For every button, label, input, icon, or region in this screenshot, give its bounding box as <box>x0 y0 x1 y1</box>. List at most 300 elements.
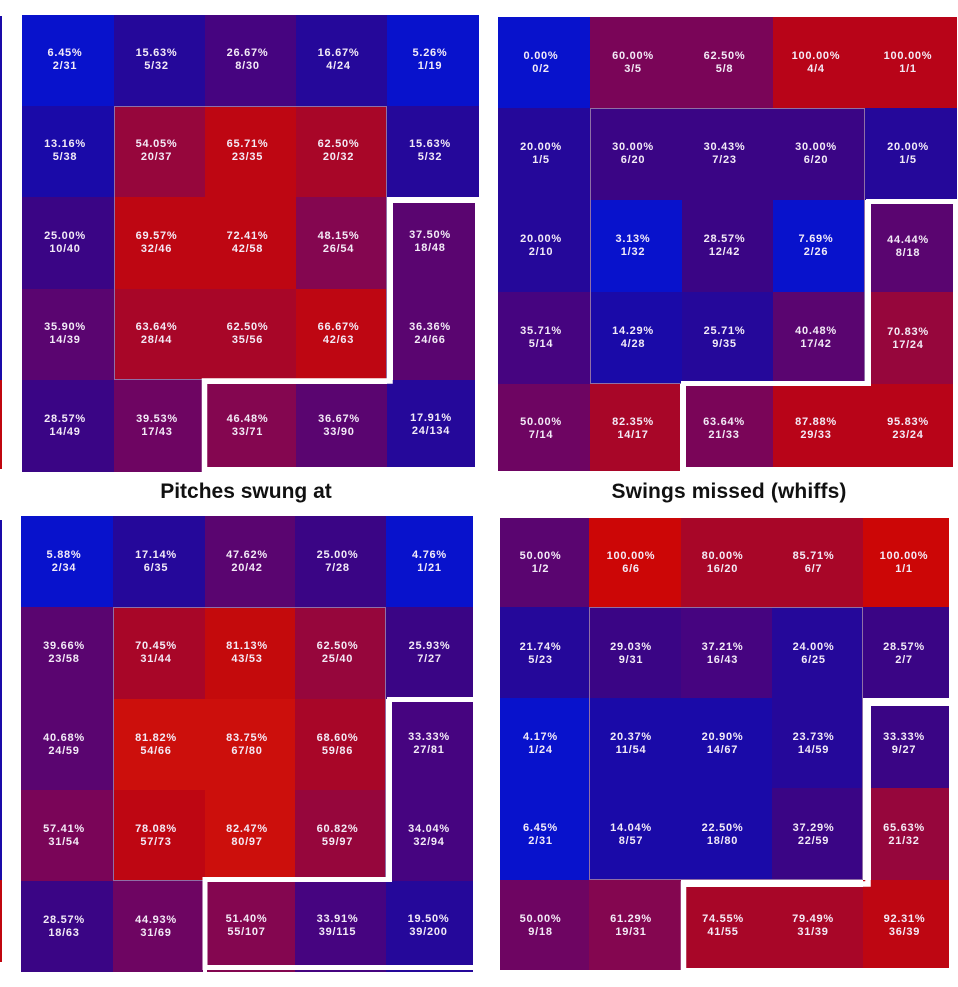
cell 60.00%: 3/5 <box>624 62 642 74</box>
cell 82.35%: 14/17 <box>617 429 649 441</box>
cell 81.13%: 81.13% <box>226 640 268 652</box>
cell 50.00%: 50.00% <box>520 913 561 925</box>
cell 28.57%: 18/63 <box>48 926 80 938</box>
cell 26.67% <box>205 15 296 106</box>
cell 17.14%: 17.14% <box>135 549 177 561</box>
cell 74.55%: 74.55% <box>702 913 744 925</box>
cell 85.71% <box>772 518 863 607</box>
cell 79.49% <box>772 887 863 968</box>
cell 7.69% <box>773 200 865 292</box>
cell 39.66%: 39.66% <box>43 640 85 652</box>
cell 5.26%: 1/19 <box>418 60 442 72</box>
cell 22.50% <box>681 788 772 880</box>
cell 3.13%: 1/32 <box>621 246 645 258</box>
cell 62.50%: 5/8 <box>716 62 733 74</box>
cell 33.33% <box>871 706 949 788</box>
cell 26.67%: 26.67% <box>227 47 268 59</box>
cell 6.45%: 2/31 <box>53 60 77 72</box>
cell 57.41% <box>21 790 113 881</box>
cell 66.67%: 42/63 <box>323 334 354 346</box>
cell 39.66%: 23/58 <box>48 653 80 665</box>
cell 57.41%: 31/54 <box>48 836 80 848</box>
cell 36.67%: 33/90 <box>323 426 355 438</box>
cell 35.71% <box>498 292 590 384</box>
cell 95.83%: 95.83% <box>887 416 929 428</box>
cell 33.33% <box>392 702 473 790</box>
cell 69.57%: 32/46 <box>141 242 172 254</box>
cell 44.93%: 31/69 <box>140 926 172 938</box>
cell 68.60%: 68.60% <box>317 732 358 744</box>
cell 51.40% <box>207 882 295 972</box>
cell 6.45%: 2/31 <box>528 835 553 847</box>
cell 81.13%: 43/53 <box>231 653 263 665</box>
cell 33.91% <box>295 882 386 972</box>
cell 13.16%: 5/38 <box>53 151 77 163</box>
cell 46.48% <box>207 384 296 467</box>
cell 25.00%: 10/40 <box>49 242 81 254</box>
cell 24.00%: 6/25 <box>801 654 826 666</box>
cell 65.63%: 21/32 <box>888 835 920 847</box>
strike zone box <box>113 607 386 881</box>
cell 50.00% <box>500 518 589 607</box>
cropped edge of left neighbouring chart, lower red cell <box>0 880 2 962</box>
cell 65.63% <box>871 788 949 880</box>
cell 0.00% <box>498 17 590 108</box>
cell 50.00%: 7/14 <box>529 429 553 441</box>
cell 50.00% <box>500 880 589 970</box>
cell 20.00%: 2/10 <box>529 246 553 258</box>
cell 63.64%: 21/33 <box>708 429 740 441</box>
cell 85.71%: 85.71% <box>793 550 834 562</box>
cell 80.00%: 80.00% <box>702 550 743 562</box>
cell 22.50%: 18/80 <box>707 835 738 847</box>
cell 51.40%: 51.40% <box>226 913 267 925</box>
cell 20.00%: 20.00% <box>887 141 929 153</box>
cell 23.73%: 14/59 <box>798 744 829 756</box>
cell 63.64%: 63.64% <box>136 321 177 333</box>
strike zone box <box>589 607 863 880</box>
cell 51.40%: 55/107 <box>227 926 266 938</box>
cell 62.50%: 62.50% <box>317 640 358 652</box>
white outline around low-away region <box>681 199 957 386</box>
cell 61.29% <box>589 880 681 970</box>
panel: pitches swung at heat map (top left) <box>22 15 479 472</box>
cell 60.82%: 60.82% <box>317 823 358 835</box>
cell 30.00% <box>773 108 865 200</box>
cell 34.04%: 34.04% <box>408 823 450 835</box>
cell 35.71%: 35.71% <box>520 325 562 337</box>
cell 16.67% <box>296 15 387 106</box>
cell 46.48%: 46.48% <box>227 413 268 425</box>
cell 50.00%: 9/18 <box>528 926 553 938</box>
cell 5.88% <box>21 516 113 607</box>
cell 92.31% <box>863 880 949 968</box>
cell 95.83% <box>865 384 953 467</box>
cell 100.00%: 100.00% <box>880 550 928 562</box>
cell 0.00%: 0/2 <box>532 62 550 74</box>
cell 62.50%: 25/40 <box>322 653 353 665</box>
cell 63.64%: 28/44 <box>141 334 172 346</box>
cell 40.48%: 40.48% <box>795 325 837 337</box>
cell 19.50% <box>386 881 473 972</box>
cell 17.91%: 24/134 <box>412 425 450 437</box>
cell 40.48%: 17/42 <box>800 338 832 350</box>
cell 7.69%: 7.69% <box>799 233 833 245</box>
cell 66.67% <box>296 289 387 380</box>
cell 33.91%: 39/115 <box>319 926 356 938</box>
cell 19.50%: 19.50% <box>408 913 449 925</box>
cell 36.67%: 36.67% <box>318 413 360 425</box>
cell 50.00%: 1/2 <box>532 562 549 574</box>
cell 82.35% <box>590 384 680 471</box>
cell 20.37% <box>589 698 681 788</box>
cell 4.17% <box>500 698 589 788</box>
cell 66.67%: 66.67% <box>318 321 359 333</box>
cell 69.57%: 69.57% <box>136 230 177 242</box>
cell 25.00%: 7/28 <box>325 562 350 574</box>
cell 50.00% <box>498 384 590 471</box>
cell 48.15%: 48.15% <box>318 230 359 242</box>
cell 34.04% <box>392 790 473 881</box>
cell 82.47% <box>205 790 295 881</box>
cell 28.57%: 12/42 <box>709 246 740 258</box>
cell 47.62%: 20/42 <box>231 562 263 574</box>
cell 37.50% <box>393 203 475 289</box>
cell 4.76% <box>386 516 473 607</box>
cell 5.26% <box>387 15 479 106</box>
cell 35.90% <box>22 289 114 380</box>
cell 28.57%: 28.57% <box>883 641 925 653</box>
cell 33.33%: 33.33% <box>883 731 925 743</box>
cell 30.00%: 6/20 <box>621 154 645 166</box>
cell 82.47%: 80/97 <box>231 836 263 848</box>
cell 100.00% <box>773 17 865 108</box>
cell 17.91% <box>387 380 475 467</box>
cell 44.93%: 44.93% <box>135 914 177 926</box>
strike zone box <box>590 108 865 384</box>
cell 28.57%: 28.57% <box>43 914 85 926</box>
cell 25.71%: 9/35 <box>712 338 737 350</box>
cell 0.00%: 0.00% <box>524 50 558 62</box>
cell 3.13%: 3.13% <box>616 233 650 245</box>
cell 5.88%: 2/34 <box>52 562 76 574</box>
cell 100.00%: 6/6 <box>622 562 640 574</box>
cell 48.15% <box>296 197 387 289</box>
cell 100.00% <box>863 518 949 607</box>
cell 78.08%: 78.08% <box>135 823 177 835</box>
cell 57.41%: 57.41% <box>43 823 85 835</box>
cell 100.00% <box>589 518 681 607</box>
cell 37.50%: 18/48 <box>414 242 446 254</box>
cell 21.74%: 21.74% <box>520 641 561 653</box>
cell 17.14% <box>113 516 205 607</box>
cell 28.57% <box>682 200 773 292</box>
cell 54.05%: 54.05% <box>136 138 177 150</box>
cell 37.21%: 16/43 <box>707 654 738 666</box>
cell 60.82% <box>295 790 386 881</box>
cell 36.67% <box>296 384 388 467</box>
cell 63.64% <box>686 386 773 467</box>
cell 68.60%: 59/86 <box>322 744 353 756</box>
cell 30.43% <box>682 108 773 200</box>
cell 14.04%: 14.04% <box>610 822 652 834</box>
cell 81.82% <box>113 699 205 790</box>
cell 30.43%: 7/23 <box>712 154 737 166</box>
cell 25.93%: 7/27 <box>417 653 442 665</box>
cell 30.00%: 30.00% <box>795 141 837 153</box>
cell 78.08%: 57/73 <box>140 836 172 848</box>
cell 5.26%: 5.26% <box>413 47 447 59</box>
cell 40.68%: 24/59 <box>48 744 80 756</box>
cell 62.50%: 35/56 <box>232 334 263 346</box>
cell 39.53%: 39.53% <box>136 413 178 425</box>
cell 6.45% <box>22 15 114 106</box>
cell 60.00% <box>590 17 682 108</box>
cell 80.00% <box>681 518 772 607</box>
cell 30.43%: 30.43% <box>704 141 745 153</box>
cell 17.14%: 6/35 <box>144 562 168 574</box>
cell 6.45% <box>500 788 589 880</box>
cell 70.45% <box>113 607 205 699</box>
cell 20.37%: 20.37% <box>610 731 652 743</box>
cell 30.00%: 6/20 <box>804 154 828 166</box>
cell 6.45%: 6.45% <box>48 47 82 59</box>
panel: pitches swung at heat map (bottom left) <box>21 516 473 972</box>
cropped edge of left neighbouring chart, upper <box>0 16 2 380</box>
strike zone box <box>114 106 387 380</box>
cell 54.05% <box>114 106 205 197</box>
cell 39.53%: 17/43 <box>141 426 173 438</box>
cell 100.00%: 100.00% <box>884 50 932 62</box>
cell 48.15%: 26/54 <box>323 242 354 254</box>
cell 20.00% <box>865 108 957 200</box>
cell 20.90%: 20.90% <box>702 731 743 743</box>
cell 23.73%: 23.73% <box>793 731 834 743</box>
cell 28.57% <box>21 881 113 972</box>
cell 82.47%: 82.47% <box>226 823 268 835</box>
heading: swings missed: Swings missed (whiffs) <box>611 480 847 503</box>
cell 85.71%: 6/7 <box>805 562 822 574</box>
cell 20.00%: 20.00% <box>520 233 562 245</box>
cell 33.33%: 27/81 <box>413 744 445 756</box>
cell 60.82%: 59/97 <box>322 836 353 848</box>
cell 28.57% <box>22 380 114 472</box>
cell 87.88%: 87.88% <box>795 416 837 428</box>
cell 80.00%: 16/20 <box>707 562 738 574</box>
cell 63.64% <box>114 289 205 380</box>
cell 70.83%: 70.83% <box>887 326 929 338</box>
cell 24.00% <box>772 607 863 698</box>
white outline around low-away region <box>202 697 473 970</box>
cell 4.76%: 4.76% <box>412 549 447 561</box>
cell 100.00%: 1/1 <box>899 62 917 74</box>
cell 20.90%: 14/67 <box>707 744 738 756</box>
cell 36.36%: 36.36% <box>409 321 451 333</box>
cell 100.00%: 100.00% <box>607 550 655 562</box>
cell 47.62% <box>205 516 295 607</box>
cell 36.36%: 24/66 <box>414 334 446 346</box>
cell 65.71% <box>205 106 296 197</box>
cell 17.91%: 17.91% <box>410 412 452 424</box>
cell 37.50%: 37.50% <box>409 229 451 241</box>
cell 13.16% <box>22 106 114 197</box>
cell 28.57%: 2/7 <box>895 654 913 666</box>
cell 28.57%: 28.57% <box>704 233 745 245</box>
panel: swings missed heat map (top right) <box>498 17 957 471</box>
cell 20.00%: 1/5 <box>532 154 550 166</box>
cell 26.67%: 8/30 <box>235 60 260 72</box>
cell 62.50%: 20/32 <box>323 151 354 163</box>
cell 70.83%: 17/24 <box>892 339 924 351</box>
cell 4.17%: 1/24 <box>528 744 553 756</box>
cell 14.29%: 4/28 <box>621 338 645 350</box>
cell 25.71% <box>682 292 773 384</box>
cell 4.76%: 1/21 <box>417 562 442 574</box>
cell 35.90%: 35.90% <box>44 321 86 333</box>
panel: swings missed heat map (bottom right) <box>500 518 949 970</box>
cell 63.64%: 63.64% <box>703 416 745 428</box>
cell 20.00%: 1/5 <box>899 154 917 166</box>
cell 92.31%: 92.31% <box>884 913 925 925</box>
cell 62.50% <box>682 17 773 108</box>
cell 83.75%: 67/80 <box>231 744 263 756</box>
cell 28.57%: 28.57% <box>44 413 86 425</box>
cell 44.93% <box>113 881 203 972</box>
cell 14.29% <box>590 292 682 384</box>
cell 87.88%: 29/33 <box>800 429 832 441</box>
cell 28.57%: 14/49 <box>49 426 81 438</box>
cell 25.93%: 25.93% <box>409 640 450 652</box>
cell 100.00%: 1/1 <box>895 562 913 574</box>
cell 35.71%: 5/14 <box>529 338 553 350</box>
cell 37.21%: 37.21% <box>702 641 743 653</box>
cell 33.91%: 33.91% <box>317 913 358 925</box>
cell 20.00%: 20.00% <box>520 141 562 153</box>
cell 95.83%: 23/24 <box>892 429 924 441</box>
cell 15.63% <box>387 106 479 197</box>
cell 14.04% <box>589 788 681 880</box>
cell 60.00%: 60.00% <box>612 50 654 62</box>
cell 68.60% <box>295 699 386 790</box>
cell 39.66% <box>21 607 113 699</box>
cell 92.31%: 36/39 <box>889 926 920 938</box>
cell 15.63%: 15.63% <box>136 47 177 59</box>
cell 78.08% <box>113 790 205 881</box>
cell 16.67%: 16.67% <box>318 47 359 59</box>
cell 34.04%: 32/94 <box>413 836 445 848</box>
cell 62.50% <box>205 289 296 380</box>
cell 14.04%: 8/57 <box>619 835 643 847</box>
cell 79.49%: 31/39 <box>797 926 829 938</box>
cell 13.16%: 13.16% <box>44 138 86 150</box>
cell 7.69%: 2/26 <box>804 246 828 258</box>
cell 65.71%: 65.71% <box>227 138 268 150</box>
cropped edge of left neighbouring chart, lower <box>0 520 2 880</box>
cell 15.63%: 5/32 <box>418 151 442 163</box>
cell 19.50%: 39/200 <box>409 926 448 938</box>
cell 15.63% <box>114 15 205 106</box>
cell 44.44% <box>871 204 953 292</box>
cell 50.00%: 50.00% <box>520 550 561 562</box>
cell 72.41%: 72.41% <box>227 230 268 242</box>
cell 69.57% <box>114 197 205 289</box>
cell 62.50%: 62.50% <box>227 321 268 333</box>
cell 24.00%: 24.00% <box>793 641 834 653</box>
cell 54.05%: 20/37 <box>141 151 172 163</box>
cell 65.71%: 23/35 <box>232 151 263 163</box>
cell 35.90%: 14/39 <box>49 334 81 346</box>
cell 20.90% <box>681 698 772 788</box>
cell 100.00% <box>865 17 957 108</box>
cell 81.82%: 54/66 <box>140 744 172 756</box>
cell 29.03% <box>589 607 681 698</box>
cell 36.36% <box>393 289 475 380</box>
cell 81.82%: 81.82% <box>135 732 177 744</box>
cell 15.63%: 5/32 <box>144 60 169 72</box>
cell 37.29%: 22/59 <box>798 835 829 847</box>
cell 6.45%: 6.45% <box>523 822 558 834</box>
cell 65.63%: 65.63% <box>883 822 925 834</box>
cell 23.73% <box>772 698 863 788</box>
cell 74.55% <box>686 887 772 968</box>
cell 79.49%: 79.49% <box>792 913 834 925</box>
cell 4.17%: 4.17% <box>523 731 558 743</box>
cell 14.29%: 14.29% <box>612 325 654 337</box>
cell 15.63%: 15.63% <box>409 138 451 150</box>
cell 29.03%: 9/31 <box>619 654 643 666</box>
cell 61.29%: 61.29% <box>610 913 652 925</box>
cell 100.00%: 100.00% <box>792 50 840 62</box>
cell 28.57% <box>863 607 949 698</box>
cell 21.74% <box>500 607 589 698</box>
cell 62.50%: 62.50% <box>318 138 359 150</box>
cell 3.13% <box>590 200 682 292</box>
cell 25.00%: 25.00% <box>44 230 86 242</box>
cell 40.68%: 40.68% <box>43 732 85 744</box>
cell 40.48% <box>773 292 865 384</box>
cell 82.35%: 82.35% <box>612 416 654 428</box>
heading: pitches swung at: Pitches swung at <box>160 480 332 503</box>
cell 83.75%: 83.75% <box>226 732 268 744</box>
cell 50.00%: 50.00% <box>520 416 562 428</box>
cell 5.88%: 5.88% <box>47 549 81 561</box>
cell 22.50%: 22.50% <box>702 822 743 834</box>
cell 25.00% <box>22 197 114 289</box>
cell 25.00% <box>295 516 386 607</box>
cell 20.00% <box>498 200 590 292</box>
cell 62.50% <box>295 607 386 699</box>
cell 72.41% <box>205 197 296 289</box>
cell 33.33%: 33.33% <box>408 731 450 743</box>
cell 37.29%: 37.29% <box>793 822 834 834</box>
cell 21.74%: 5/23 <box>528 654 553 666</box>
cell 62.50%: 62.50% <box>704 50 745 62</box>
cell 44.44%: 8/18 <box>896 246 920 258</box>
cell 46.48%: 33/71 <box>232 426 263 438</box>
cell 44.44%: 44.44% <box>887 234 929 246</box>
cell 39.53% <box>114 380 204 472</box>
cell 37.29% <box>772 788 863 880</box>
cell 25.71%: 25.71% <box>704 325 745 337</box>
cell 74.55%: 41/55 <box>707 926 739 938</box>
white outline around low-away region <box>680 880 871 970</box>
cell 30.00%: 30.00% <box>612 141 654 153</box>
cell 72.41%: 42/58 <box>232 242 263 254</box>
cell 70.45%: 70.45% <box>135 640 177 652</box>
cell 70.45%: 31/44 <box>140 653 172 665</box>
cell 20.37%: 11/54 <box>616 744 646 756</box>
cell 37.21% <box>681 607 772 698</box>
